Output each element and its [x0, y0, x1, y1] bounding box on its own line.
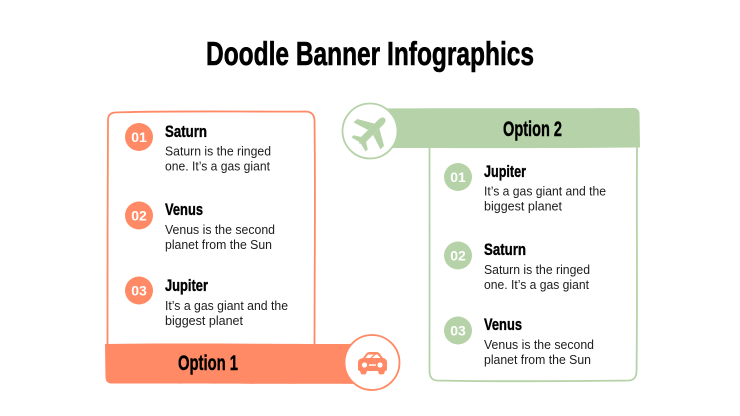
- item: Venus: 03: [450, 322, 466, 338]
- item: Jupiter: [125, 276, 288, 328]
- item: Jupiter: Jupiter: [484, 162, 526, 181]
- item: Venus: Venus is the second: [165, 222, 275, 237]
- item: Venus: [444, 315, 594, 367]
- item: Jupiter: biggest planet: [484, 198, 562, 214]
- item: Saturn: Saturn is the ringed: [484, 262, 590, 277]
- item: Venus: 02: [131, 208, 147, 224]
- item: Venus: Venus: [165, 200, 203, 219]
- item: Venus: planet from the Sun: [484, 352, 591, 367]
- banner: option 2: [380, 108, 640, 148]
- item: Jupiter: 03: [131, 282, 147, 298]
- item: Saturn: Saturn is the ringed: [165, 144, 271, 158]
- item: Jupiter: biggest planet: [165, 313, 243, 328]
- item: Venus: [125, 200, 275, 252]
- item: Jupiter: Jupiter: [165, 276, 208, 295]
- item: Venus: Venus: [484, 315, 522, 334]
- title: Doodle Banner Infographics: [206, 35, 534, 72]
- icon: car: [344, 335, 400, 390]
- item: Saturn: [444, 240, 590, 292]
- panel: option 2: [342, 104, 640, 381]
- item: Saturn: Saturn: [484, 240, 526, 259]
- item: Saturn: 01: [131, 129, 147, 145]
- item: Saturn: 02: [450, 248, 466, 264]
- icon: airplane: [342, 104, 398, 158]
- item: Venus: planet from the Sun: [165, 237, 272, 252]
- item: Saturn: one. It’s a gas giant: [484, 277, 589, 292]
- panel: option 1: [105, 111, 400, 390]
- banner label: option 1: Option 1: [178, 352, 238, 375]
- item: Jupiter: It’s a gas giant and the: [484, 184, 606, 198]
- banner label: option 2: Option 2: [503, 118, 562, 141]
- item: Saturn: [125, 122, 271, 174]
- item: Jupiter: 01: [450, 169, 466, 185]
- item: Jupiter: [444, 162, 606, 214]
- banner: option 1: [105, 344, 365, 384]
- item: Jupiter: It’s a gas giant and the: [165, 298, 288, 313]
- item: Saturn: one. It’s a gas giant: [165, 158, 270, 174]
- panel outline: option 2: [429, 146, 637, 381]
- panel outline: option 1: [107, 111, 315, 350]
- item: Saturn: Saturn: [165, 122, 207, 141]
- item: Venus: Venus is the second: [484, 337, 594, 352]
